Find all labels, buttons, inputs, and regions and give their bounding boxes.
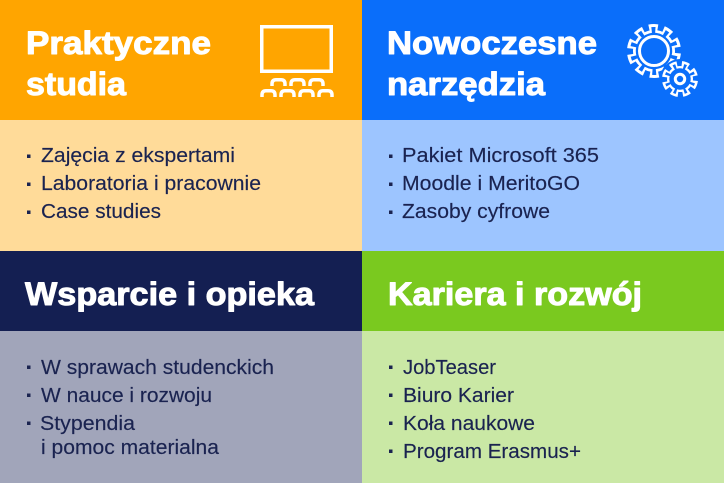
list [389,357,581,463]
list: Pakiet Microsoft 365 [402,145,599,167]
header background [362,251,724,331]
heading [387,25,597,102]
list: Case studies [41,201,161,223]
heading [26,25,211,102]
list: Biuro Karier [403,385,514,407]
list: i pomoc materialna [41,437,220,459]
list: Stypendia [40,413,136,435]
icon: lecture room [262,27,332,97]
header background [0,0,362,120]
body background [0,120,362,251]
body background [362,331,724,483]
list: Koła naukowe [403,413,535,435]
heading: Nowoczesne [387,25,597,61]
heading: Wsparcie i opieka [25,276,314,312]
list: Zasoby cyfrowe [402,201,550,223]
heading: narzędzia [387,66,545,102]
heading: studia [26,66,126,102]
list: JobTeaser [403,357,496,379]
panel: Praktyczne studia [0,0,362,251]
list: Moodle i MeritoGO [402,173,580,195]
list: Laboratoria i pracownie [41,173,261,195]
list: Program Erasmus+ [403,441,581,463]
list: W nauce i rozwoju [41,385,212,407]
header background [0,251,362,331]
icon: gears [628,25,700,99]
list: Zajęcia z ekspertami [41,145,235,167]
list [27,145,261,223]
body background [0,331,362,483]
heading: Praktyczne [26,25,211,61]
body background [362,120,724,251]
panel: Kariera i rozwój [362,251,724,483]
header background [362,0,724,120]
list [389,145,599,223]
list [27,357,274,459]
panel: Wsparcie i opieka [0,251,362,483]
list: W sprawach studenckich [41,357,274,379]
panel: Nowoczesne narzędzia [362,0,724,251]
heading: Kariera i rozwój [388,276,642,312]
